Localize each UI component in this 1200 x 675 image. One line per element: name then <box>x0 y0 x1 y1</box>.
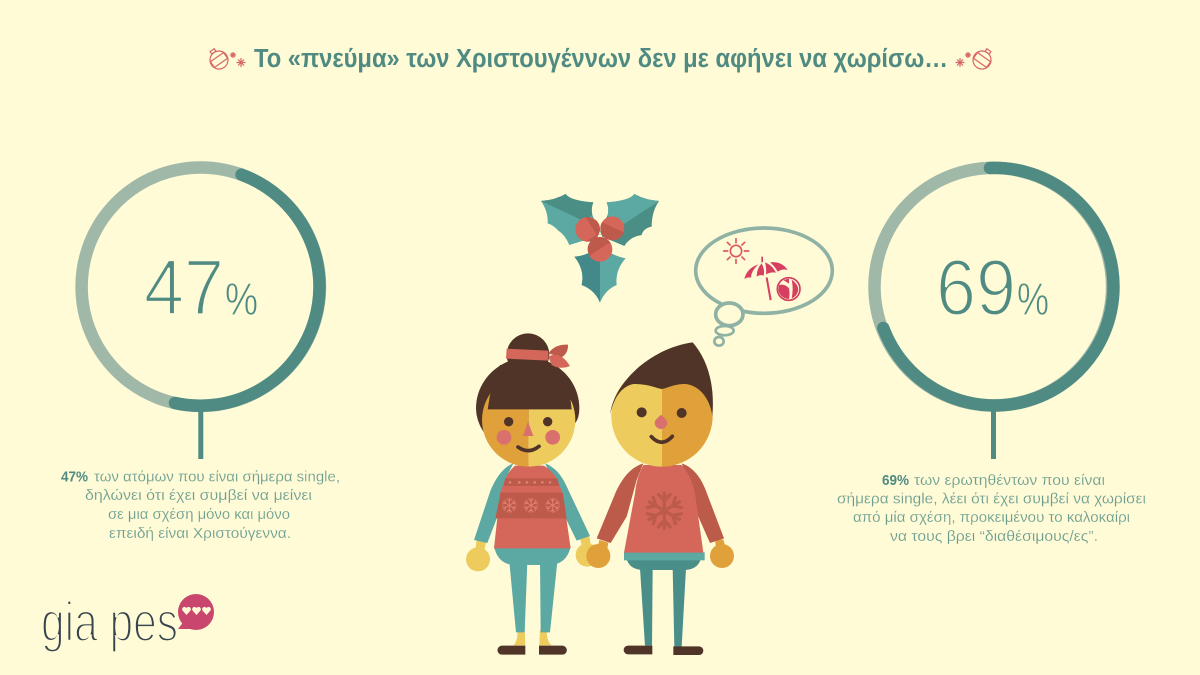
big number 69%: % <box>1017 274 1049 324</box>
boy hands <box>586 539 734 568</box>
girl <box>466 333 599 655</box>
description text: των ερωτηθέντων που είναι <box>914 473 1105 489</box>
girl hands <box>466 536 599 571</box>
girl sweater <box>494 466 571 548</box>
connector line <box>198 410 203 459</box>
description text: σήμερα single, λέει ότι έχει συμβεί να χωρίσει <box>837 492 1146 508</box>
description text: δηλώνει ότι έχει συμβεί να μείνει <box>85 488 312 504</box>
donut chart: 47% <box>82 168 320 406</box>
panel: 69 percent <box>837 168 1146 545</box>
logo wordmark: gia pes <box>41 590 178 653</box>
boy sweater <box>624 465 703 553</box>
boy face <box>610 342 713 467</box>
description text: να τους βρει “διαθέσιμους/ες”. <box>890 529 1098 545</box>
connector line <box>991 410 996 459</box>
heading text: Το «πνεύμα» των Χριστουγέννων δεν με αφήνει να χωρίσω… <box>254 45 948 73</box>
sweater pattern <box>495 478 567 518</box>
panel: 47 percent <box>61 168 340 542</box>
description text: από μία σχέση, προκειμένου το καλοκαίρι <box>853 510 1130 526</box>
boy sleeves <box>597 463 643 543</box>
icon: left ornaments <box>205 45 246 73</box>
icon: snowflake <box>646 493 682 528</box>
girl sleeves <box>474 463 513 543</box>
illustration: couple <box>466 333 734 655</box>
girl legs and socks <box>494 547 571 655</box>
donut chart: 69% <box>874 168 1113 406</box>
icon: beach umbrella <box>744 257 788 300</box>
description text: σε μια σχέση μόνο και μόνο <box>108 507 290 523</box>
icon: holly <box>541 194 659 303</box>
boy legs <box>624 552 705 655</box>
logo: gia pes <box>41 590 214 653</box>
description text <box>61 470 340 542</box>
description text: 47% <box>61 470 88 486</box>
description text: 69% <box>882 473 909 489</box>
icon: sun <box>724 239 749 263</box>
thought bubble <box>696 228 832 346</box>
logo speech bubble <box>178 594 214 630</box>
big number 47%: % <box>225 274 258 324</box>
girl hair back and bun <box>476 333 579 432</box>
icon: right ornaments <box>956 45 996 73</box>
big number 47%: 47 <box>144 242 224 332</box>
title <box>205 45 996 73</box>
description text <box>837 473 1146 545</box>
girl face <box>482 365 575 467</box>
icon: beach ball <box>777 278 800 300</box>
girl ribbon <box>506 345 570 368</box>
description text: των ατόμων που είναι σήμερα single, <box>94 470 340 486</box>
description text: επειδή είναι Χριστούγεννα. <box>109 526 291 542</box>
boy <box>586 342 734 655</box>
big number 69%: 69 <box>936 242 1016 332</box>
